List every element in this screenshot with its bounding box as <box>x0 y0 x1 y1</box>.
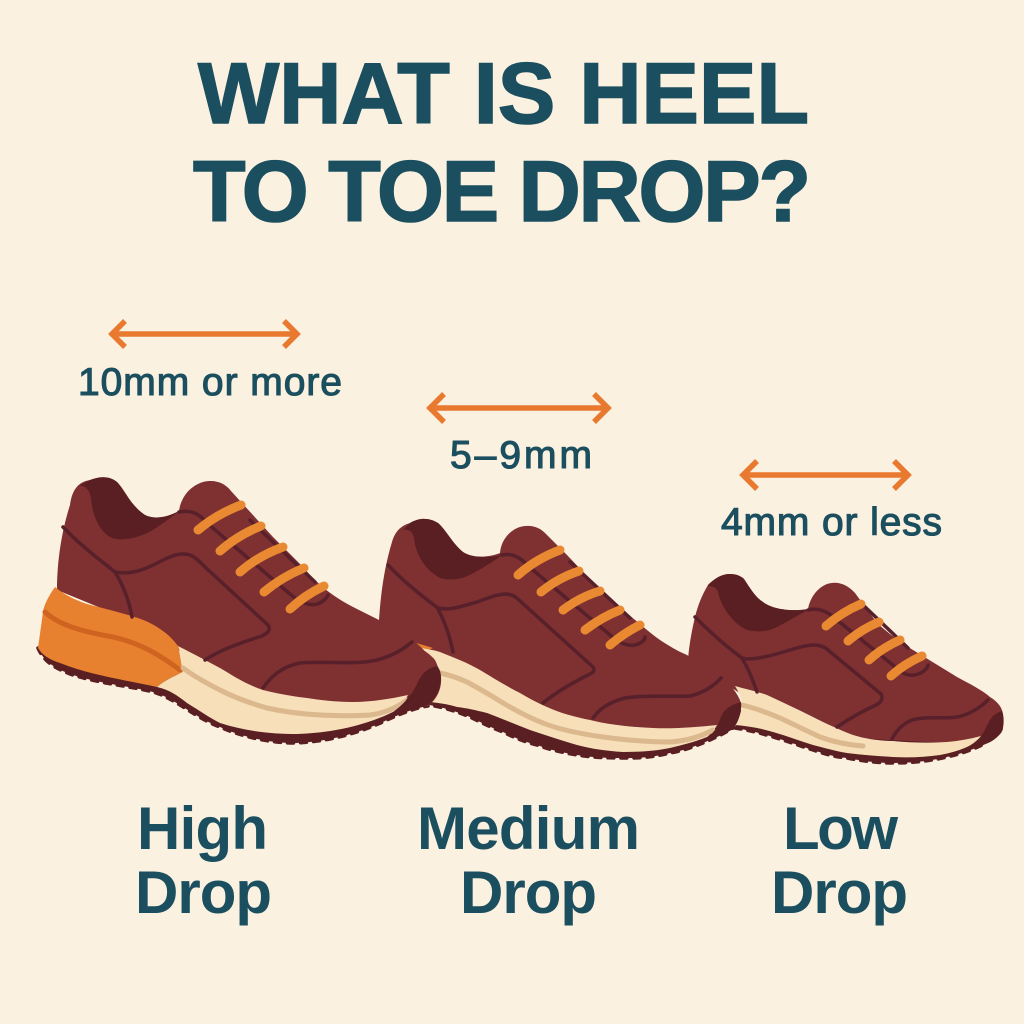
label: medium drop <box>417 795 640 926</box>
arrow: low drop measure <box>743 461 908 489</box>
label: 10mm or more: 10mm or more <box>78 361 342 404</box>
title: WHAT IS HEEL <box>198 46 809 142</box>
label: 5-9mm: 5–9mm <box>450 434 592 477</box>
label: medium drop: Medium <box>417 795 640 862</box>
shoe: high drop <box>38 477 441 743</box>
label: high drop <box>135 795 272 926</box>
laces: low drop <box>826 604 922 676</box>
label: low drop: Drop <box>771 859 908 926</box>
label: low drop: Low <box>783 795 898 862</box>
shoe: medium drop <box>379 519 741 758</box>
arrow: medium drop measure <box>430 394 608 422</box>
label: high drop: High <box>137 795 268 862</box>
shoe: low drop <box>688 574 1004 763</box>
laces: high drop <box>198 505 324 609</box>
title <box>193 46 811 240</box>
label: low drop <box>771 795 908 926</box>
laces: medium drop <box>518 550 640 645</box>
label: medium drop: Drop <box>460 859 597 926</box>
title: TO TOE DROP? <box>193 144 811 240</box>
label: 4mm or less: 4mm or less <box>721 501 942 544</box>
label: high drop: Drop <box>135 859 272 926</box>
arrow: high drop measure <box>112 321 297 347</box>
